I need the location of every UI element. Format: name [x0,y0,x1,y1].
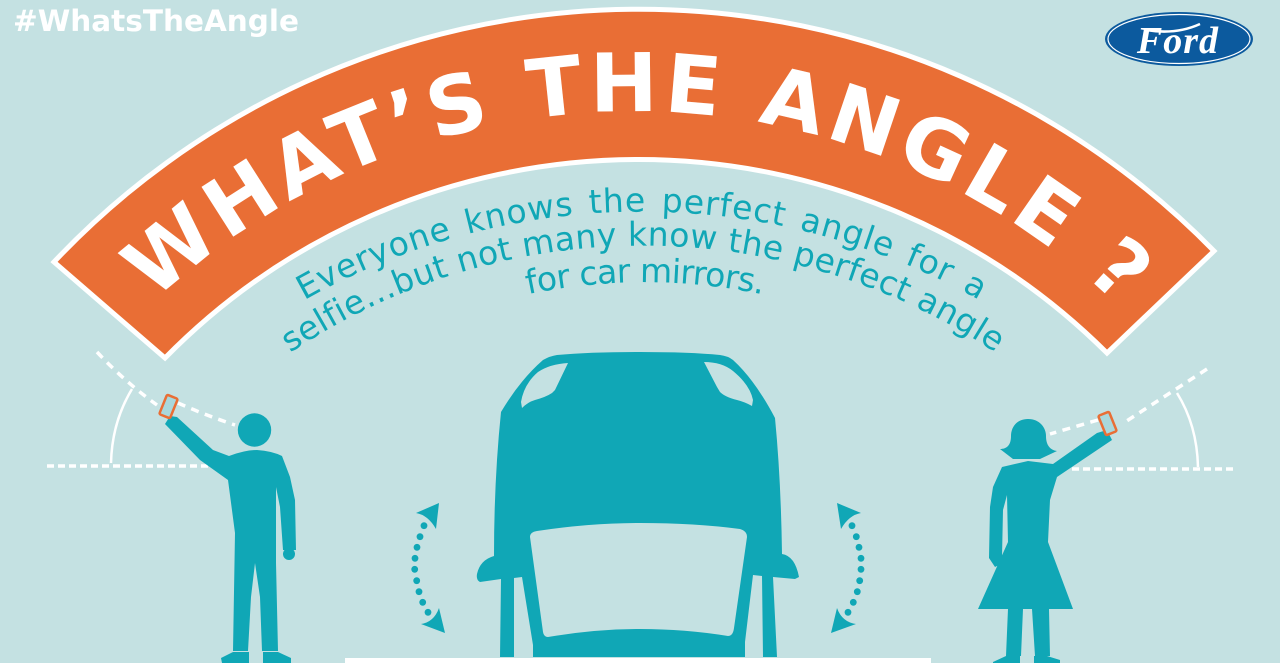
Ford logo [1105,12,1253,66]
Ford logo: Ford [1136,20,1219,62]
man angle lines [47,352,235,466]
car front view [477,352,799,657]
man taking selfie [47,352,296,663]
hashtag: #WhatsTheAngle [13,4,299,38]
woman taking selfie [978,369,1237,663]
woman phone [1098,412,1117,435]
left mirror arrow [411,503,445,633]
subtitle text: for car mirrors. [525,258,760,294]
subtitle text: Everyone knows the perfect angle for a [296,187,983,299]
car body [477,352,799,657]
woman figure [978,419,1112,663]
ground bar [345,658,931,663]
title: WHAT’S THE ANGLE ? [118,52,1150,294]
car windshield [530,523,747,637]
man figure [165,413,296,663]
car headlights [521,362,753,408]
subtitle text: selfie...but not many know the perfect angle [284,220,1002,352]
man phone [159,395,178,418]
woman angle lines [1050,369,1237,469]
right mirror arrow [831,503,864,633]
